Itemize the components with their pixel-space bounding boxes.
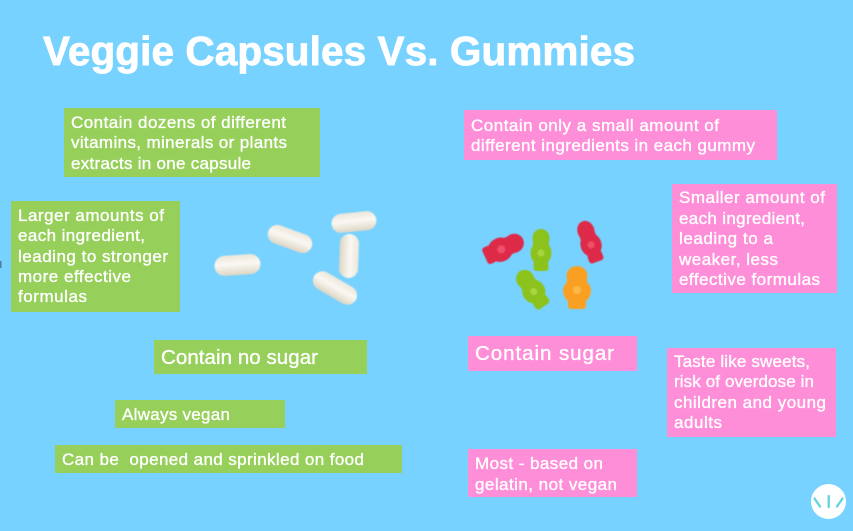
gummy fact: smaller amounts xyxy=(672,184,837,293)
gummy fact: smaller amounts: Smaller amount of xyxy=(679,188,825,207)
title: Veggie Capsules Vs. Gummies xyxy=(43,28,635,74)
capsule fact: sprinkle on food: Can be opened and sprinkled on food xyxy=(62,450,364,469)
capsule fact: larger amounts xyxy=(11,201,180,312)
capsule fact: sprinkle on food xyxy=(55,445,402,473)
gummy fact: smaller amounts: each ingredient, xyxy=(679,209,805,228)
capsule fact: larger amounts: formulas xyxy=(18,287,87,306)
gummy fact: smaller amounts: effective formulas xyxy=(679,270,820,289)
gummy fact: overdose risk: risk of overdose in xyxy=(674,372,814,391)
gummy fact: sugar: Contain sugar xyxy=(475,342,614,365)
gummy fact: few ingredients: Contain only a small amount of xyxy=(471,116,719,135)
gummy fact: few ingredients: different ingredients in each gummy xyxy=(471,136,756,155)
capsule fact: larger amounts: leading to stronger xyxy=(18,247,168,266)
gummy fact: few ingredients xyxy=(464,110,777,160)
capsule fact: vegan xyxy=(115,400,285,428)
gummy fact: overdose risk: children and young xyxy=(674,393,826,412)
icon: logo xyxy=(811,484,846,519)
capsule fact: dozens of ingredients xyxy=(64,108,320,177)
gummy fact: gelatin: Most - based on xyxy=(475,454,603,473)
gummy fact: sugar xyxy=(468,336,637,371)
panel: capsule benefits xyxy=(11,108,402,473)
capsule fact: no sugar: Contain no sugar xyxy=(161,346,318,369)
icon: gummy bears xyxy=(480,218,607,313)
capsule fact: larger amounts: Larger amounts of xyxy=(18,206,164,225)
gummy fact: overdose risk: adults xyxy=(674,413,722,432)
capsule fact: dozens of ingredients: Contain dozens of different xyxy=(71,113,286,132)
gummy fact: smaller amounts: weaker, less xyxy=(678,250,778,269)
icon: veggie capsules xyxy=(214,210,377,308)
capsule fact: no sugar xyxy=(154,340,367,374)
panel: gummy drawbacks xyxy=(464,110,837,497)
capsule fact: dozens of ingredients: extracts in one capsule xyxy=(71,154,251,173)
gummy fact: gelatin: gelatin, not vegan xyxy=(475,475,617,494)
capsule fact: larger amounts: each ingredient, xyxy=(18,226,145,245)
gummy fact: overdose risk: Taste like sweets, xyxy=(674,352,810,371)
gummy fact: gelatin xyxy=(468,449,637,497)
capsule fact: vegan: Always vegan xyxy=(122,405,230,424)
gummy fact: smaller amounts: leading to a xyxy=(679,229,774,248)
gummy fact: overdose risk xyxy=(667,348,836,437)
left edge mark xyxy=(0,261,2,268)
capsule fact: larger amounts: more effective xyxy=(18,267,131,286)
capsule fact: dozens of ingredients: vitamins, minerals or plants xyxy=(71,133,287,152)
